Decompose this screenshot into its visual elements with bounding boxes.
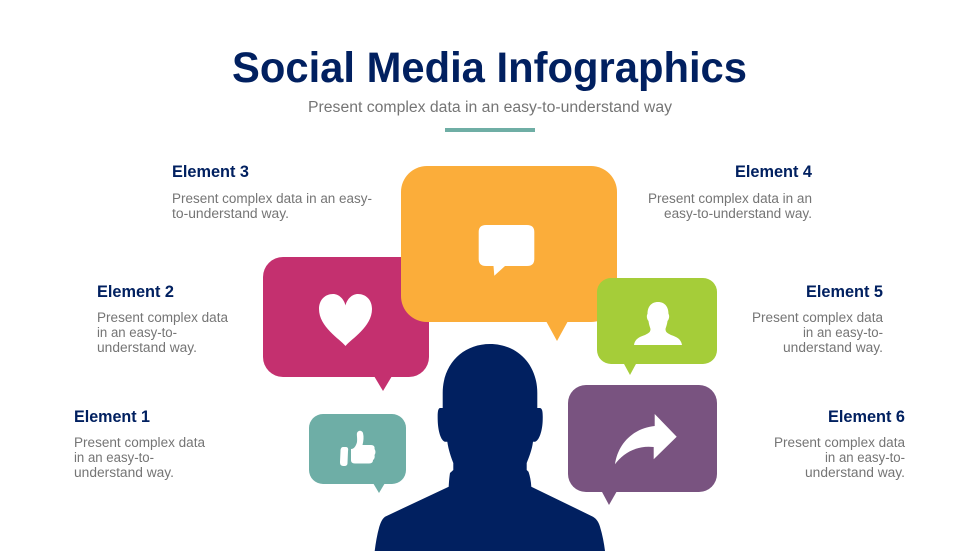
text block: element 5: Element 5 (806, 282, 883, 301)
text block: element 6 (774, 407, 905, 480)
text block: element 1 (74, 407, 205, 480)
speech bubble: orange with chat (401, 166, 617, 341)
speech bubble: teal with thumbs up (309, 414, 406, 493)
text block: element 2 (97, 282, 228, 355)
text block: element 1: in an easy-to- (74, 450, 154, 465)
person silhouette (375, 344, 605, 551)
text block: element 3: Element 3 (172, 162, 249, 181)
text block: element 6: Present complex data (774, 435, 905, 450)
text block: element 5: understand way. (783, 340, 883, 355)
speech bubble: purple with share arrow (568, 385, 717, 505)
icon: share arrow (615, 414, 677, 464)
text block: element 1: understand way. (74, 465, 174, 480)
text block: element 4: Present complex data in an (648, 191, 812, 206)
speech bubble: green with user (597, 278, 717, 375)
text block: element 4: easy-to-understand way. (664, 206, 812, 221)
text block: element 5 (752, 282, 883, 355)
speech bubble: pink with heart (263, 257, 429, 391)
text block: element 2: understand way. (97, 340, 197, 355)
subtitle: Present complex data in an easy-to-understand way (308, 99, 672, 116)
text block: element 3: to-understand way. (172, 206, 289, 221)
text block: element 5: in an easy-to- (803, 325, 883, 340)
text block: element 6: Element 6 (828, 407, 905, 426)
text block: element 2: Element 2 (97, 282, 174, 301)
icon: user (634, 302, 682, 345)
text block: element 2: Present complex data (97, 310, 228, 325)
icon: heart (319, 294, 372, 346)
text block: element 2: in an easy-to- (97, 325, 177, 340)
icon: chat bubble (479, 225, 534, 276)
text block: element 6: understand way. (805, 465, 905, 480)
icon: thumbs up (340, 431, 375, 466)
text block: element 4 (648, 162, 813, 221)
text block: element 1: Element 1 (74, 407, 150, 426)
text block: element 5: Present complex data (752, 310, 883, 325)
title: Social Media Infographics (232, 44, 747, 92)
text block: element 6: in an easy-to- (825, 450, 905, 465)
text block: element 1: Present complex data (74, 435, 205, 450)
text block: element 3: Present complex data in an easy- (172, 191, 372, 206)
text block: element 4: Element 4 (735, 162, 813, 181)
text block: element 3 (172, 162, 372, 221)
title underline (445, 128, 535, 132)
